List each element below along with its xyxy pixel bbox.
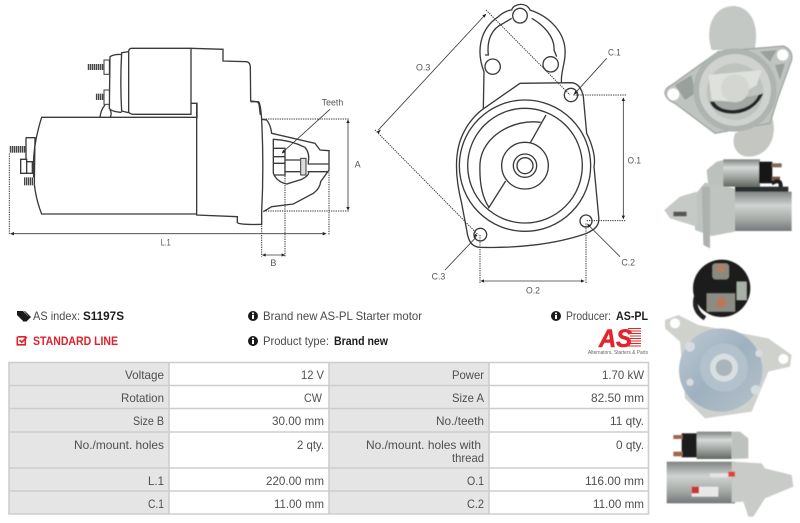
- mounting bracket and top lobe: [480, 4, 565, 108]
- mounting holes: [474, 8, 592, 241]
- photo: starter rear view: [665, 260, 792, 418]
- dimension lines O.1 O.2 O.3 C.1 C.2 C.3: C.1: [608, 48, 621, 58]
- row: mounting holes: 2 qty.: [297, 438, 324, 452]
- dimension lines O.1 O.2 O.3 C.1 C.2 C.3: C.3: [432, 271, 445, 281]
- row: voltage and power: Power: [452, 368, 484, 382]
- row: rotation and size A: 82.50 mm: [591, 391, 644, 405]
- dimension lines L.1 B A and Teeth: A: [355, 159, 361, 169]
- row: mounting holes: No./mount. holes with: [366, 438, 481, 452]
- photo: starter side view top: [664, 159, 792, 248]
- dimension lines O.1 O.2 O.3 C.1 C.2 C.3: O.1: [628, 156, 641, 166]
- info row: standard line: STANDARD LINE: [33, 334, 118, 348]
- row: C.1 and C.2: C.1: [148, 497, 164, 511]
- photo: starter side view bottom: [667, 432, 793, 517]
- info row: producer: [551, 309, 648, 323]
- icon: info: [248, 311, 258, 321]
- motor body and pinion nose: [9, 102, 329, 224]
- row: C.1 and C.2: 11.00 mm: [593, 497, 644, 511]
- front view technical drawing: [375, 4, 641, 295]
- row: L.1 and O.1: 220.00 mm: [266, 474, 324, 488]
- icon: info: [248, 336, 258, 346]
- info row: AS index: AS index:: [33, 309, 80, 323]
- table cell backgrounds: [9, 362, 648, 514]
- dimension lines O.1 O.2 O.3 C.1 C.2 C.3: O.3: [416, 62, 430, 72]
- info row: producer: Producer:: [566, 309, 611, 323]
- row: C.1 and C.2: [148, 497, 644, 511]
- icon: tags: [17, 311, 31, 322]
- row: C.1 and C.2: C.2: [467, 497, 484, 511]
- info row: AS index: [17, 309, 124, 323]
- row: voltage and power: 12 V: [301, 368, 324, 382]
- row: L.1 and O.1: [148, 474, 644, 488]
- row: size B and teeth: 30.00 mm: [272, 414, 324, 428]
- info row: description: Brand new AS-PL Starter motor: [263, 309, 422, 323]
- row: rotation and size A: Size A: [452, 391, 484, 405]
- photo: starter front nose view: [665, 6, 792, 157]
- row: rotation and size A: CW: [304, 391, 323, 405]
- row: size B and teeth: Size B: [133, 414, 164, 428]
- row: size B and teeth: [133, 414, 644, 428]
- flange outline: [456, 83, 599, 247]
- row: voltage and power: 1.70 kW: [602, 368, 645, 382]
- info row: producer: AS-PL: [616, 309, 648, 323]
- dimension lines O.1 O.2 O.3 C.1 C.2 C.3: [375, 10, 641, 295]
- AS-PL logo: Alternators, Starters & Parts: [588, 350, 648, 356]
- dimension lines O.1 O.2 O.3 C.1 C.2 C.3: O.2: [526, 285, 540, 295]
- row: mounting holes: [74, 438, 644, 465]
- info row: product type: Brand new: [334, 334, 389, 348]
- row: L.1 and O.1: O.1: [467, 474, 484, 488]
- row: voltage and power: [125, 368, 645, 382]
- info row: product type: Product type:: [263, 334, 329, 348]
- side view technical drawing: [9, 48, 361, 268]
- dimension lines O.1 O.2 O.3 C.1 C.2 C.3: C.2: [621, 258, 635, 268]
- solenoid and drive housing outline: [87, 48, 260, 118]
- dimension lines L.1 B A and Teeth: Teeth: [322, 98, 343, 108]
- row: L.1 and O.1: 116.00 mm: [585, 474, 644, 488]
- dimension lines L.1 B A and Teeth: L.1: [161, 238, 171, 248]
- AS-PL logo: AS: [598, 325, 632, 353]
- row: L.1 and O.1: L.1: [148, 474, 164, 488]
- row: mounting holes: 0 qty.: [616, 438, 644, 452]
- dimension lines L.1 B A and Teeth: [9, 98, 361, 268]
- icon: red checkbox: [17, 337, 27, 345]
- AS-PL logo: [588, 325, 648, 356]
- concentric nose rings and hub: [459, 100, 591, 231]
- dimension lines L.1 B A and Teeth: B: [270, 258, 276, 268]
- row: size B and teeth: No./teeth: [436, 414, 484, 428]
- row: rotation and size A: Rotation: [121, 391, 164, 405]
- row: C.1 and C.2: 11.00 mm: [274, 497, 324, 511]
- row: mounting holes: No./mount. holes: [74, 438, 164, 452]
- row: voltage and power: Voltage: [125, 368, 164, 382]
- row: size B and teeth: 11 qty.: [610, 414, 644, 428]
- info row: AS index: S1197S: [83, 309, 124, 323]
- row: rotation and size A: [121, 391, 644, 405]
- icon: info: [551, 311, 561, 321]
- row: mounting holes: thread: [452, 451, 484, 465]
- info row: product type: [248, 334, 389, 348]
- specification table: [9, 362, 648, 514]
